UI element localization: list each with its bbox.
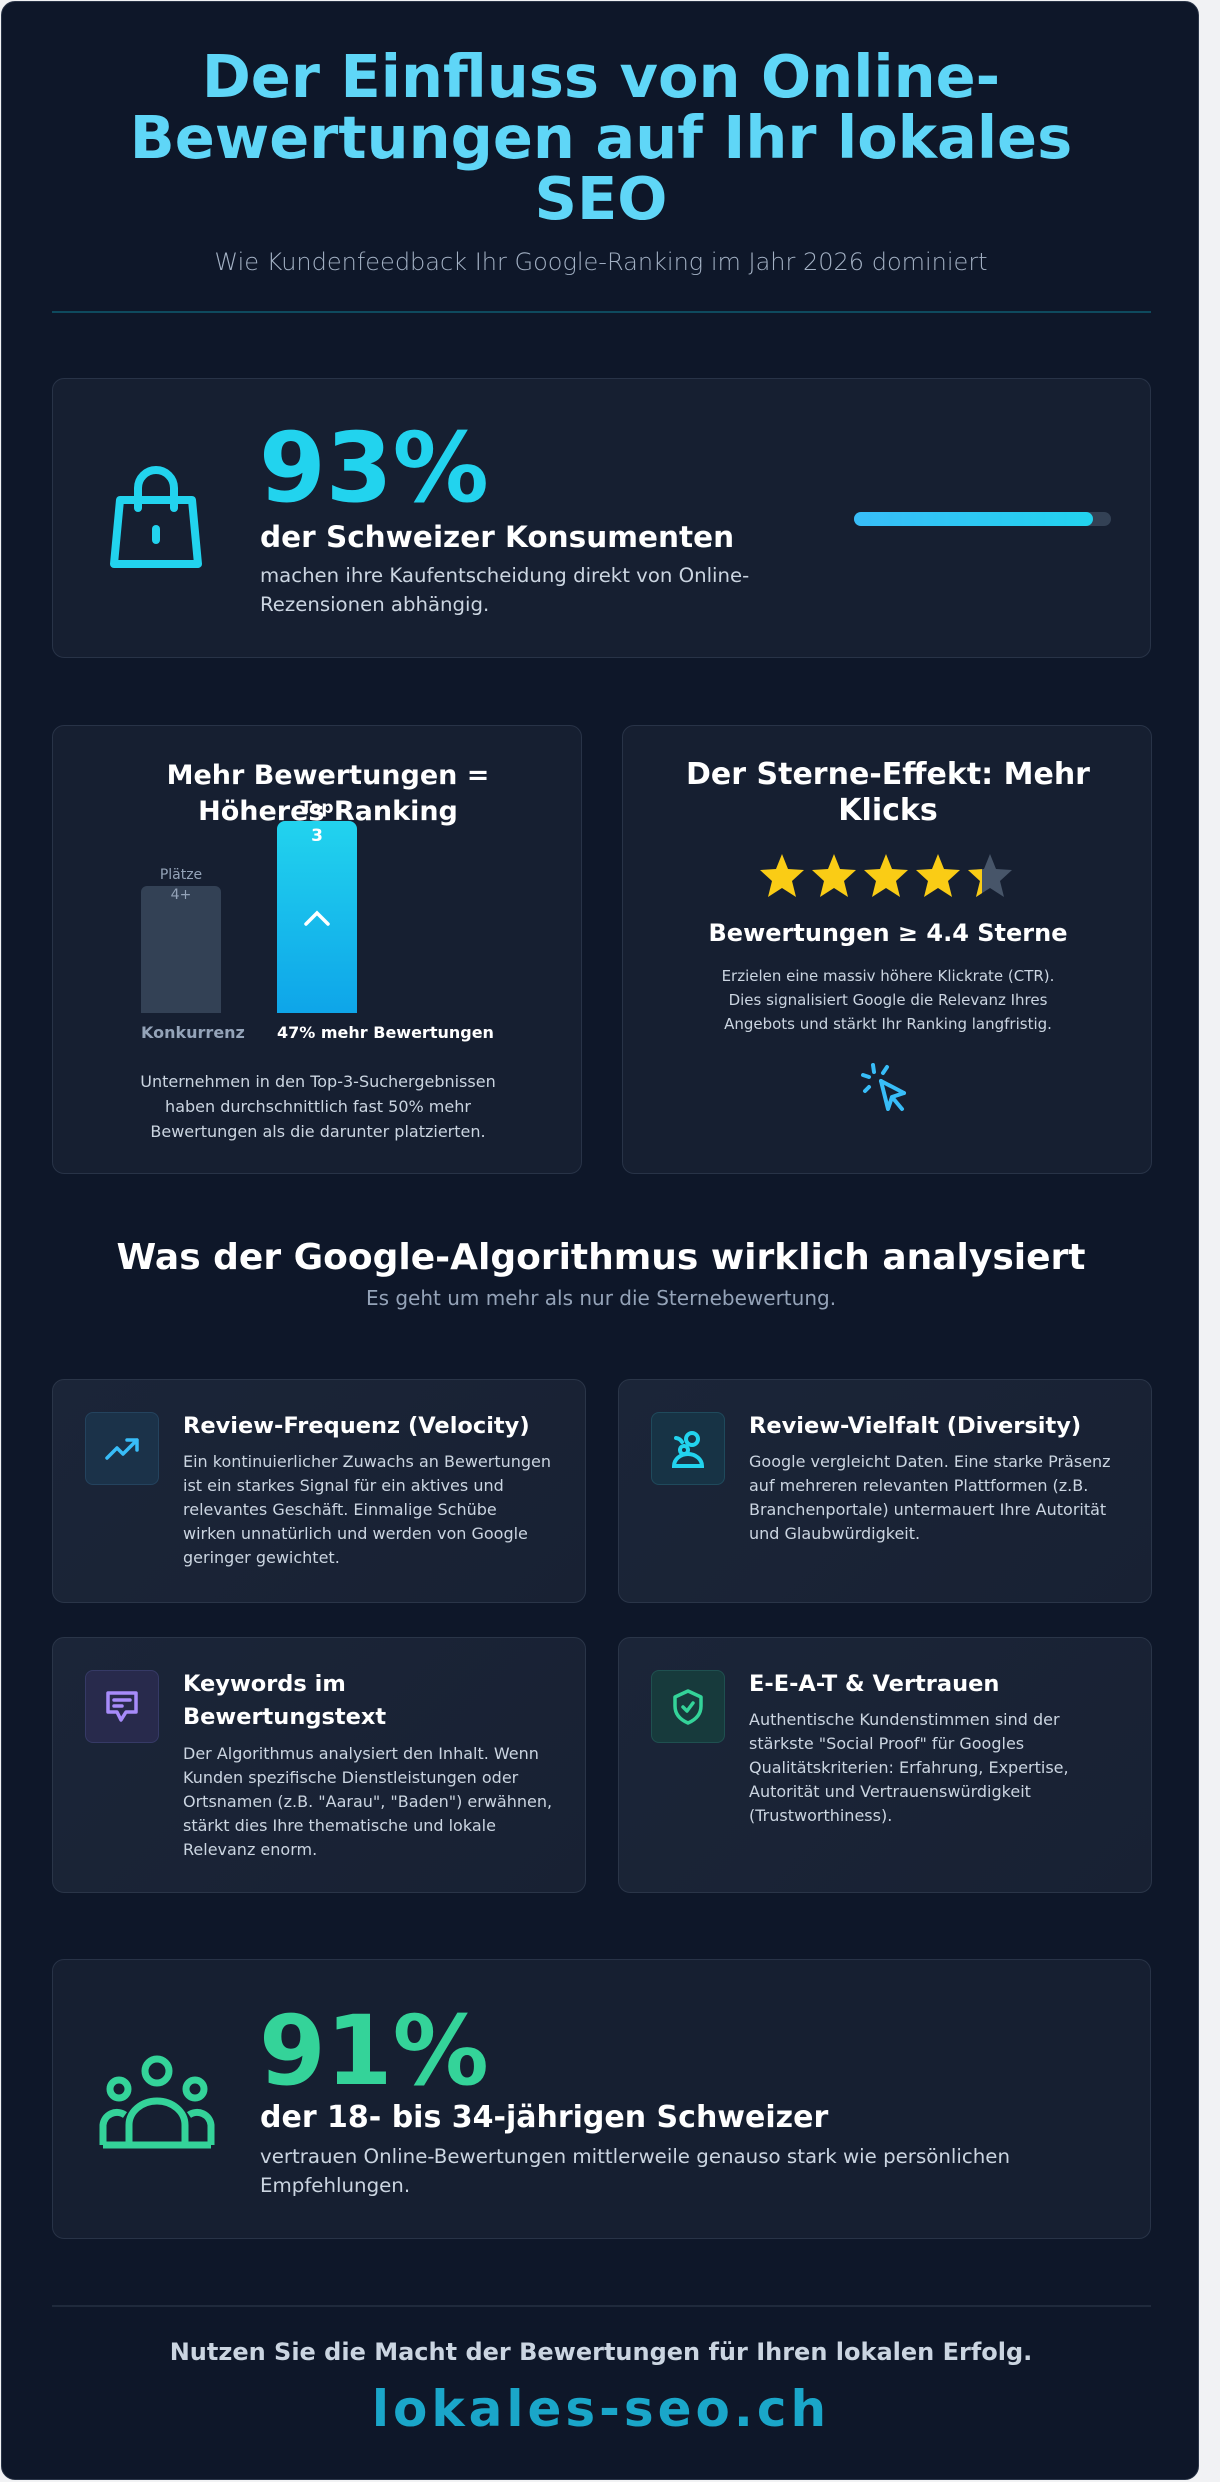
bar chart: 4+ xyxy=(171,887,191,903)
stat number: 93% xyxy=(259,412,489,524)
heading: Mehr Bewertungen = xyxy=(167,760,489,791)
stat number: 91% xyxy=(259,1995,489,2107)
bar chart: Plätze xyxy=(160,867,202,883)
title: Keywords im xyxy=(183,1671,346,1697)
section heading: Was der Google-Algorithmus wirklich analysiert xyxy=(116,1237,1086,1278)
icon: shield xyxy=(651,1670,725,1743)
icon: shopping bag xyxy=(110,466,202,568)
title: Der Einfluss von Online- xyxy=(202,42,1000,111)
star description: Erzielen eine massiv höhere Klickrate (CTR). xyxy=(722,967,1054,985)
title: Review-Vielfalt (Diversity) xyxy=(749,1413,1081,1439)
icon: stars xyxy=(760,854,1012,897)
chart description: haben durchschnittlich fast 50% mehr xyxy=(165,1097,471,1116)
panel: 91% stat xyxy=(52,1959,1151,2239)
subtitle: Wie Kundenfeedback Ihr Google-Ranking im Jahr 2026 dominiert xyxy=(214,248,988,276)
description: Der Algorithmus analysiert den Inhalt. Wenn Kunden spezifische Dienstleistungen oder Ortsnamen (z.B. "Aarau", "Baden") erwähnen, stärkt dies Ihre thematische und lokale Relevanz enorm. xyxy=(183,1744,552,1859)
panel: diversity xyxy=(618,1379,1152,1603)
bar chart: 47% mehr Bewertungen xyxy=(277,1023,494,1042)
panel: velocity xyxy=(52,1379,586,1603)
stat label: der Schweizer Konsumenten xyxy=(260,520,734,554)
title: Bewertungstext xyxy=(183,1704,386,1730)
star description: Angebots und stärkt Ihr Ranking langfristig. xyxy=(724,1015,1052,1033)
panel: keywords xyxy=(52,1637,586,1893)
bar chart: 3 xyxy=(311,826,323,846)
title: Bewertungen auf Ihr lokales xyxy=(130,103,1072,172)
footer brand: lokales-seo.ch xyxy=(372,2380,830,2438)
stat description: Rezensionen abhängig. xyxy=(260,593,489,616)
description: Ein kontinuierlicher Zuwachs an Bewertungen ist ein starkes Signal für ein aktives und relevantes Geschäft. Einmalige Schübe wirken unnatürlich und werden von Google geringer gewichtet. xyxy=(183,1452,551,1567)
title xyxy=(130,42,1072,233)
chart description: Unternehmen in den Top-3-Suchergebnissen xyxy=(140,1072,496,1091)
description: Google vergleicht Daten. Eine starke Präsenz auf mehreren relevanten Plattformen (z.B. Branchenportale) untermauert Ihre Autorität und Glaubwürdigkeit. xyxy=(749,1452,1111,1543)
stat description: Empfehlungen. xyxy=(260,2174,410,2197)
heading xyxy=(167,760,489,827)
stat label: der 18- bis 34-jährigen Schweizer xyxy=(260,2100,828,2135)
panel: E-E-A-T xyxy=(618,1637,1152,1893)
heading xyxy=(686,757,1090,828)
star label: Bewertungen ≥ 4.4 Sterne xyxy=(709,919,1067,947)
description: Authentische Kundenstimmen sind der stärkste "Social Proof" für Googles Qualitätskriterien: Erfahrung, Expertise, Autorität und Vertrauenswürdigkeit (Trustworthiness). xyxy=(749,1710,1069,1825)
title: SEO xyxy=(535,164,667,233)
icon: trend xyxy=(85,1412,159,1485)
icon: chat xyxy=(85,1670,159,1743)
title: Review-Frequenz (Velocity) xyxy=(183,1413,530,1439)
panel: 93% stat xyxy=(52,378,1151,658)
footer call to action: Nutzen Sie die Macht der Bewertungen für Ihren lokalen Erfolg. xyxy=(170,2338,1032,2366)
heading: Klicks xyxy=(838,793,938,828)
star description xyxy=(722,967,1054,1033)
star description: Dies signalisiert Google die Relevanz Ihres xyxy=(729,991,1047,1009)
bar chart: Konkurrenz xyxy=(141,1023,245,1042)
section subtitle: Es geht um mehr als nur die Sternebewertung. xyxy=(366,1286,836,1310)
heading: Der Sterne-Effekt: Mehr xyxy=(686,757,1090,792)
progress bar xyxy=(854,512,1111,526)
icon: cursor click xyxy=(861,1063,906,1112)
icon: users xyxy=(651,1412,725,1485)
chart description: Bewertungen als die darunter platzierten. xyxy=(150,1122,486,1141)
title: E-E-A-T & Vertrauen xyxy=(749,1671,999,1697)
chart description xyxy=(140,1072,496,1141)
stat description: machen ihre Kaufentscheidung direkt von Online- xyxy=(260,564,749,587)
icon: people group xyxy=(100,2056,214,2148)
panel: star effect xyxy=(622,725,1152,1174)
stat description xyxy=(260,2145,1010,2197)
stat description: vertrauen Online-Bewertungen mittlerweile genauso stark wie persönlichen xyxy=(260,2145,1010,2168)
heading: Höheres Ranking xyxy=(198,796,458,827)
stat description xyxy=(260,564,749,616)
bar chart xyxy=(141,798,494,1042)
title xyxy=(183,1671,386,1730)
panel: more reviews chart xyxy=(52,725,582,1174)
bar chart: Top xyxy=(300,798,334,818)
